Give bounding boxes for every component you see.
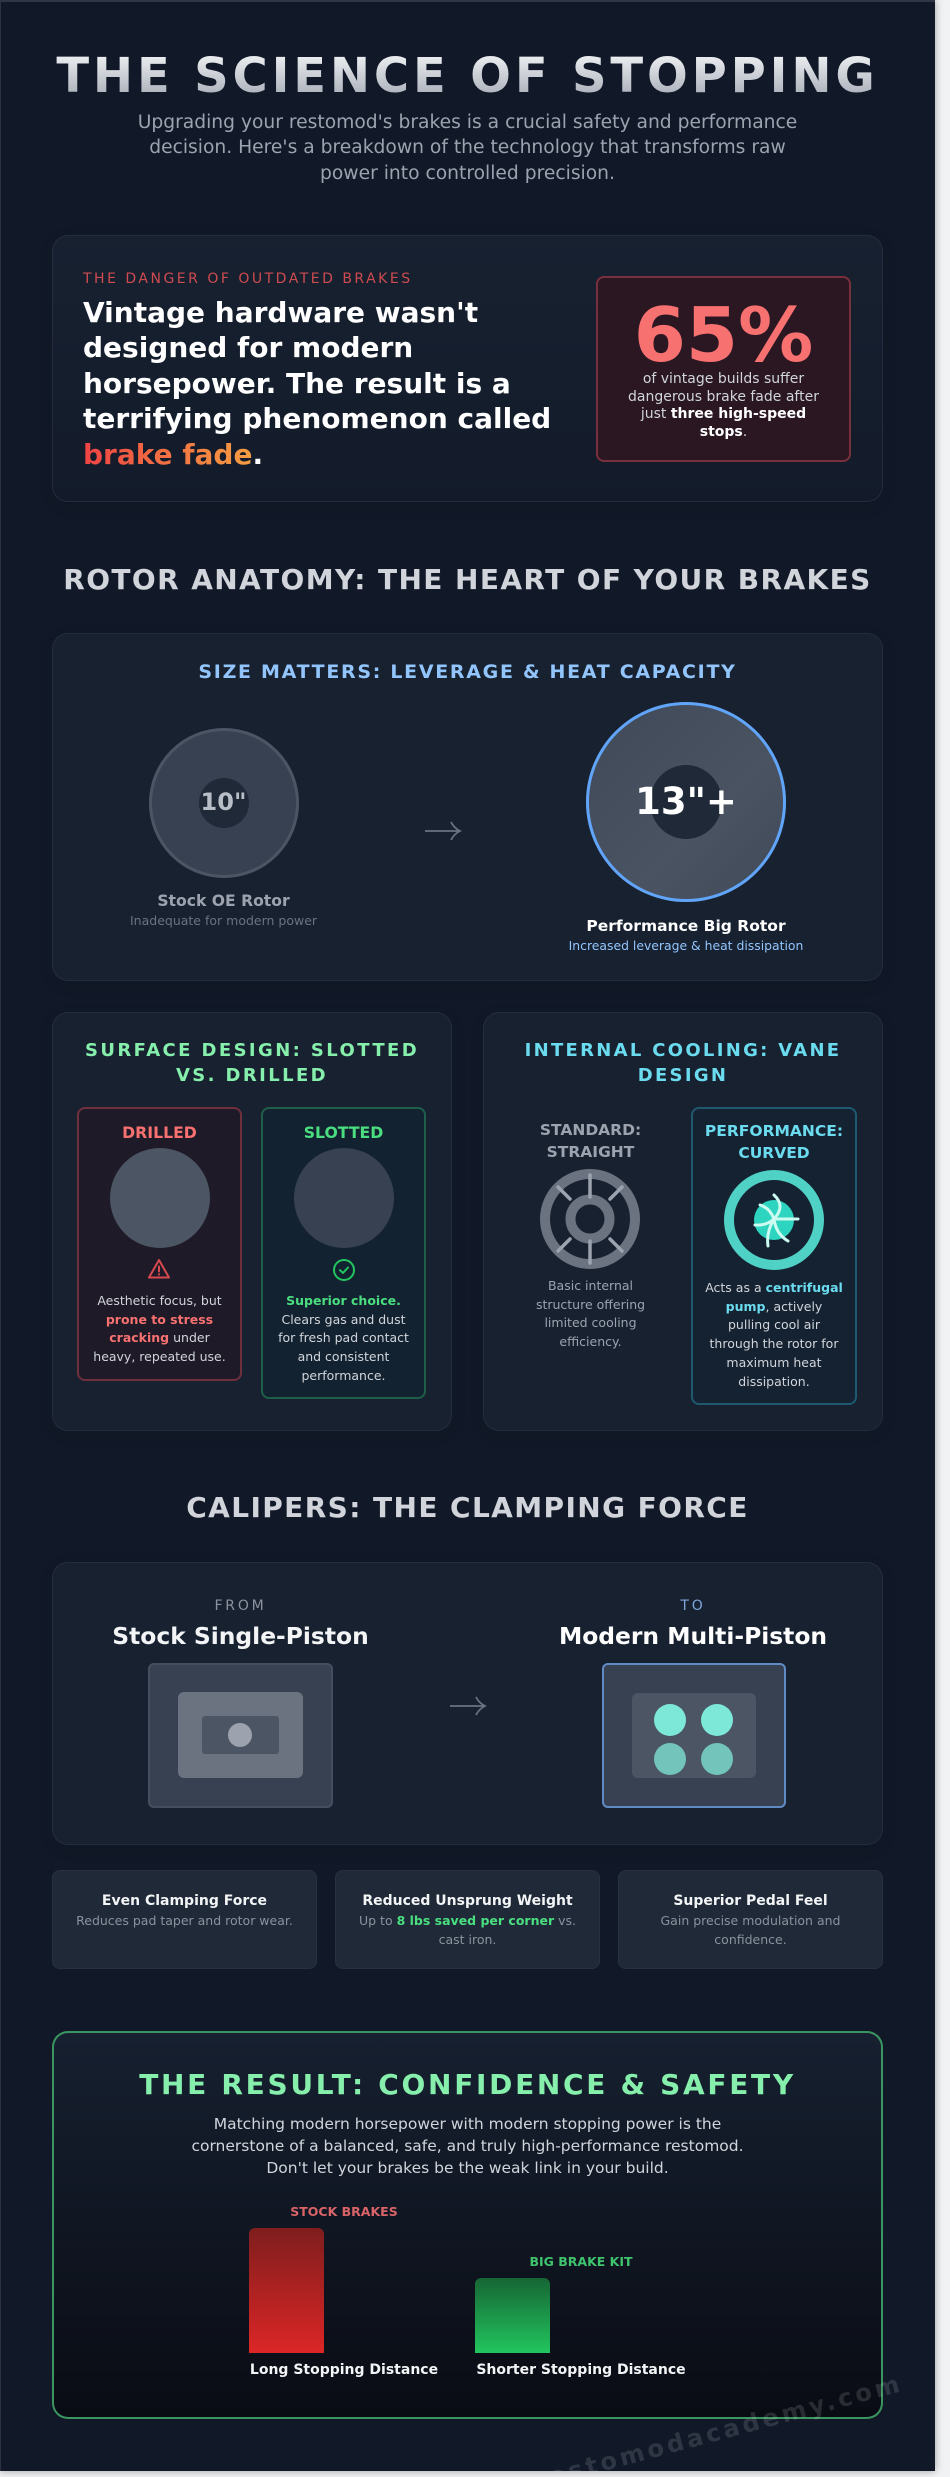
- stat caption: dangerous brake fade after: [628, 388, 819, 404]
- standard label: [540, 1121, 641, 1161]
- danger headline: brake fade.: [83, 438, 263, 471]
- icon: warning triangle: [148, 1259, 170, 1278]
- slotted text: Superior choice.: [286, 1293, 401, 1308]
- drilled text: cracking under: [109, 1330, 210, 1345]
- heading: rotor anatomy: ROTOR ANATOMY: THE HEART OF YOUR BRAKES: [63, 563, 872, 596]
- feature text: Up to 8 lbs saved per corner vs.: [359, 1913, 576, 1928]
- cooling heading: DESIGN: [638, 1065, 728, 1086]
- danger headline: Vintage hardware wasn't: [83, 296, 478, 329]
- slotted text: [278, 1293, 409, 1383]
- stock note: Inadequate for modern power: [130, 913, 317, 928]
- standard label: STANDARD:: [540, 1121, 641, 1139]
- panel: danger of outdated brakes: [52, 235, 883, 502]
- danger headline: [83, 296, 551, 471]
- slotted text: Clears gas and dust: [281, 1312, 406, 1327]
- heading: calipers: CALIPERS: THE CLAMPING FORCE: [186, 1491, 749, 1524]
- performance text: pulling cool air: [728, 1317, 820, 1332]
- subtitle: Upgrading your restomod's brakes is a crucial safety and performance: [138, 112, 797, 133]
- standard text: efficiency.: [559, 1334, 622, 1349]
- standard text: [536, 1278, 645, 1349]
- danger headline: designed for modern: [83, 331, 413, 364]
- subtitle: [138, 112, 797, 184]
- stock size: 10": [201, 788, 246, 816]
- kit bar: [475, 2278, 550, 2353]
- panel: size matters: [52, 633, 883, 981]
- piston top right: [701, 1704, 733, 1736]
- surface heading: SURFACE DESIGN: SLOTTED: [85, 1040, 419, 1061]
- subtitle: power into controlled precision.: [320, 163, 615, 184]
- performance label: PERFORMANCE:: [705, 1122, 843, 1140]
- stock bar: [249, 2228, 324, 2353]
- slotted text: and consistent: [298, 1349, 389, 1364]
- bar chart: [249, 2204, 686, 2378]
- big rotor hat: [650, 765, 722, 839]
- arrow: [450, 1696, 487, 1716]
- modern caliper: [559, 1598, 827, 1808]
- result text: Matching modern horsepower with modern stopping power is the: [214, 2115, 721, 2133]
- icon: curved vanes: [724, 1170, 824, 1270]
- slotted box: [261, 1107, 426, 1399]
- surface heading: VS. DRILLED: [176, 1065, 328, 1086]
- stock caliper name: Stock Single-Piston: [112, 1622, 369, 1650]
- feature text: Reduces pad taper and rotor wear.: [76, 1913, 293, 1928]
- performance text: maximum heat: [726, 1355, 822, 1370]
- feature title: Reduced Unsprung Weight: [362, 1893, 573, 1909]
- feature: superior pedal feel: [618, 1870, 883, 1969]
- panel: internal cooling: [483, 1012, 883, 1431]
- result text: [191, 2115, 744, 2177]
- standard text: limited cooling: [544, 1315, 637, 1330]
- stock rotor: [130, 728, 317, 928]
- stock caliper bracket: [178, 1692, 303, 1778]
- danger headline: terrifying phenomenon called: [83, 402, 551, 435]
- feature text: [359, 1913, 576, 1947]
- result heading: THE RESULT: CONFIDENCE & SAFETY: [139, 2068, 796, 2101]
- feature title: Even Clamping Force: [102, 1893, 267, 1909]
- arrow: [425, 822, 462, 840]
- drilled box: [77, 1107, 242, 1381]
- stat number: 65%: [634, 291, 813, 379]
- surface heading: [85, 1040, 419, 1086]
- feature: reduced unsprung weight: [335, 1870, 600, 1969]
- performance text: dissipation.: [738, 1374, 810, 1389]
- title: THE SCIENCE OF STOPPING: [56, 48, 879, 104]
- kit bar caption: Shorter Stopping Distance: [476, 2362, 686, 2378]
- cooling heading: [525, 1040, 841, 1086]
- stat caption: just three high-speed: [641, 406, 806, 422]
- feature title: Superior Pedal Feel: [673, 1893, 828, 1909]
- panel: caliper comparison: [52, 1562, 883, 1845]
- icon: check circle: [333, 1259, 355, 1281]
- icon: straight vanes: [540, 1169, 640, 1269]
- stat caption: [628, 371, 819, 440]
- drilled text: prone to stress: [106, 1312, 213, 1327]
- stat caption: stops.: [700, 424, 747, 440]
- standard label: STRAIGHT: [547, 1143, 634, 1161]
- to label: TO: [680, 1598, 706, 1614]
- feature text: confidence.: [714, 1932, 787, 1947]
- piston top left: [654, 1704, 686, 1736]
- stock rotor disc: [149, 728, 299, 878]
- panel: the result: [52, 2031, 883, 2419]
- drilled rotor: [110, 1148, 210, 1248]
- piston bottom left: [654, 1743, 686, 1775]
- standard text: structure offering: [536, 1297, 645, 1312]
- kit bar label: BIG BRAKE KIT: [529, 2254, 633, 2269]
- stock caliper body: [148, 1663, 333, 1808]
- drilled text: heavy, repeated use.: [93, 1349, 226, 1364]
- stock bar caption: Long Stopping Distance: [250, 2362, 438, 2378]
- from label: FROM: [214, 1598, 267, 1614]
- modern caliper name: Modern Multi-Piston: [559, 1622, 827, 1650]
- slotted label: SLOTTED: [304, 1123, 383, 1142]
- performance text: [705, 1280, 843, 1389]
- big size: 13"+: [635, 780, 737, 823]
- performance label: [705, 1122, 843, 1162]
- performance label: CURVED: [738, 1144, 810, 1162]
- stock rotor hat: [199, 778, 249, 828]
- stock bar label: STOCK BRAKES: [290, 2204, 398, 2219]
- cooling heading: INTERNAL COOLING: VANE: [525, 1040, 841, 1061]
- stat caption: of vintage builds suffer: [643, 371, 804, 387]
- standard column: [536, 1121, 645, 1349]
- big rotor disc: [586, 702, 786, 902]
- feature text: [660, 1913, 840, 1947]
- feature text: cast iron.: [439, 1932, 496, 1947]
- drilled text: [93, 1293, 226, 1364]
- stock caliper pad: [202, 1716, 279, 1754]
- stock caliper: [112, 1598, 369, 1808]
- stock piston: [228, 1723, 252, 1747]
- performance text: through the rotor for: [710, 1336, 838, 1351]
- performance text: pump, actively: [726, 1299, 822, 1314]
- panel: surface design: [52, 1012, 452, 1431]
- danger label: THE DANGER OF OUTDATED BRAKES: [83, 271, 413, 287]
- danger headline: horsepower. The result is a: [83, 367, 511, 400]
- result text: Don't let your brakes be the weak link in your build.: [266, 2159, 669, 2177]
- result text: cornerstone of a balanced, safe, and truly high-performance restomod.: [191, 2137, 744, 2155]
- standard text: Basic internal: [548, 1278, 633, 1293]
- drilled label: DRILLED: [122, 1123, 197, 1142]
- feature: even clamping force: [52, 1870, 317, 1969]
- subtitle: decision. Here's a breakdown of the technology that transforms raw: [149, 137, 786, 158]
- modern caliper bracket: [632, 1693, 756, 1778]
- piston bottom right: [701, 1743, 733, 1775]
- modern caliper body: [602, 1663, 786, 1808]
- stat box: 65%: [596, 276, 851, 462]
- stock name: Stock OE Rotor: [157, 892, 290, 910]
- slotted text: performance.: [301, 1368, 386, 1383]
- big name: Performance Big Rotor: [586, 917, 786, 935]
- slotted text: for fresh pad contact: [278, 1330, 409, 1345]
- drilled text: Aesthetic focus, but: [97, 1293, 222, 1308]
- big note: Increased leverage & heat dissipation: [569, 938, 803, 953]
- performance text: Acts as a centrifugal: [705, 1280, 843, 1295]
- performance box: [691, 1107, 857, 1405]
- slotted rotor: [294, 1148, 394, 1248]
- big rotor: [569, 702, 803, 953]
- size heading: SIZE MATTERS: LEVERAGE & HEAT CAPACITY: [198, 661, 737, 683]
- feature text: Gain precise modulation and: [660, 1913, 840, 1928]
